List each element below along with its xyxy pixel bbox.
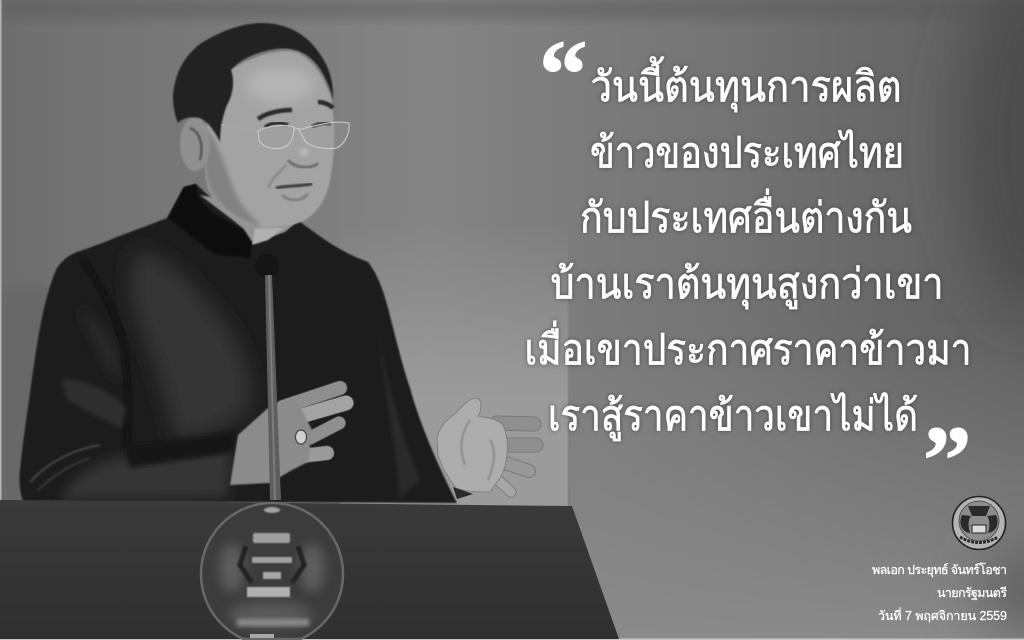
attribution: วันที่ 7 พฤศจิกายน 2559 — [878, 607, 1007, 623]
face shadow — [204, 128, 262, 227]
attribution — [872, 562, 1007, 623]
quote text: บ้านเราต้นทุนสูงกว่าเขา — [550, 260, 944, 310]
podium seal — [201, 503, 343, 639]
shirt — [252, 228, 284, 245]
neck — [200, 195, 305, 243]
eyebrows — [258, 102, 333, 119]
jacket — [19, 184, 457, 503]
podium — [0, 500, 619, 639]
quote text — [524, 56, 972, 441]
mouth — [276, 184, 312, 200]
chest sheen — [131, 250, 251, 440]
head — [173, 23, 349, 227]
eyes — [265, 123, 331, 127]
quote text: ข้าวของประเทศไทย — [590, 129, 904, 176]
closing quote mark: ” — [923, 407, 972, 514]
nose — [268, 148, 318, 188]
collar — [168, 184, 252, 258]
hair — [173, 23, 333, 142]
quote text: เราสู้ราคาข้าวเขาไม่ได้ — [548, 392, 918, 441]
glasses — [221, 122, 349, 149]
hand: centre — [230, 388, 346, 485]
quote text: กับประเทศอื่นต่างกัน — [580, 189, 912, 241]
microphone — [255, 254, 281, 500]
attribution: พลเอก ประยุทธ์ จันทร์โอชา — [872, 562, 1007, 578]
ear — [180, 117, 210, 171]
face — [204, 51, 334, 227]
right jacket panel — [378, 330, 420, 498]
attribution: นายกรัฐมนตรี — [937, 586, 1007, 600]
sleeve seam — [82, 258, 128, 445]
ring — [296, 430, 306, 444]
hand: right — [437, 398, 536, 499]
sleeve folds — [62, 378, 126, 428]
quote text: เมื่อเขาประกาศราคาข้าวมา — [524, 321, 972, 373]
quote text: วันนี้ต้นทุนการผลิต — [590, 56, 902, 113]
forehead highlight — [246, 67, 314, 103]
government seal logo — [952, 496, 1006, 550]
photo: speaker — [19, 23, 536, 503]
lower sleeve — [60, 444, 232, 500]
opening quote mark: “ — [539, 21, 588, 128]
